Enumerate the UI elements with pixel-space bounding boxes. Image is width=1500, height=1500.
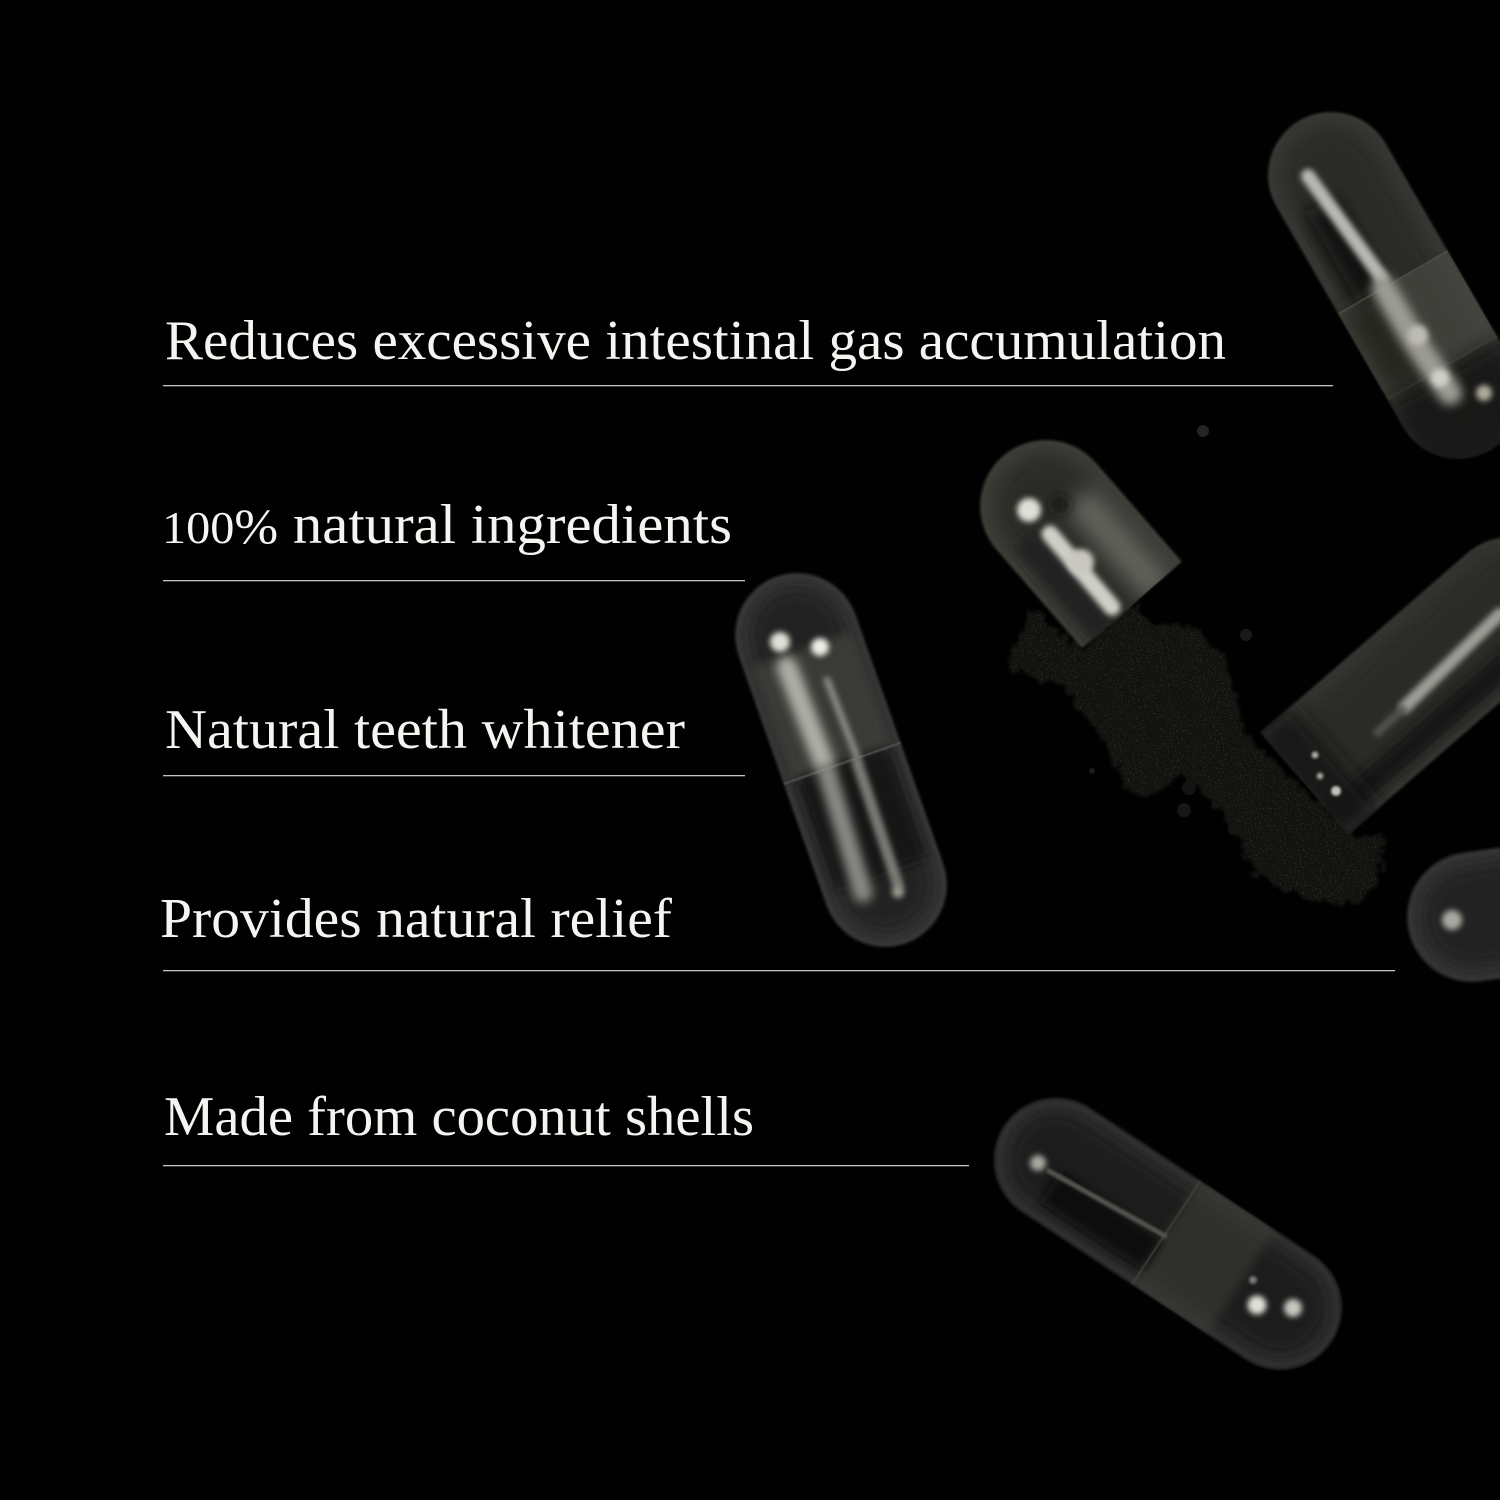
infographic canvas: [162, 110, 1500, 1371]
benefit 5 rule: [163, 1165, 969, 1166]
benefit 3 rule: [163, 775, 745, 776]
benefit 4 text: Provides natural relief: [160, 888, 672, 950]
benefit 2 rule: [163, 580, 745, 581]
benefit 1 rule: [163, 385, 1333, 386]
charcoal powder spill: [1008, 425, 1382, 903]
benefit list: [160, 310, 1395, 1166]
benefit 1 text: Reduces excessive intestinal gas accumulation: [165, 310, 1226, 372]
benefit 2 text: 100% natural ingredients: [162, 494, 732, 556]
capsule: centre: [734, 572, 948, 948]
capsule: opened, upper half: [978, 438, 1182, 648]
benefit 5 text: Made from coconut shells: [164, 1086, 754, 1148]
benefit 3 text: Natural teeth whitener: [165, 699, 685, 761]
capsule: opened, right half: [1260, 536, 1500, 834]
capsule: right edge: [1406, 846, 1500, 983]
benefit 4 rule: [163, 970, 1395, 971]
capsule: bottom: [993, 1097, 1343, 1370]
capsule: top right: [1266, 110, 1500, 459]
